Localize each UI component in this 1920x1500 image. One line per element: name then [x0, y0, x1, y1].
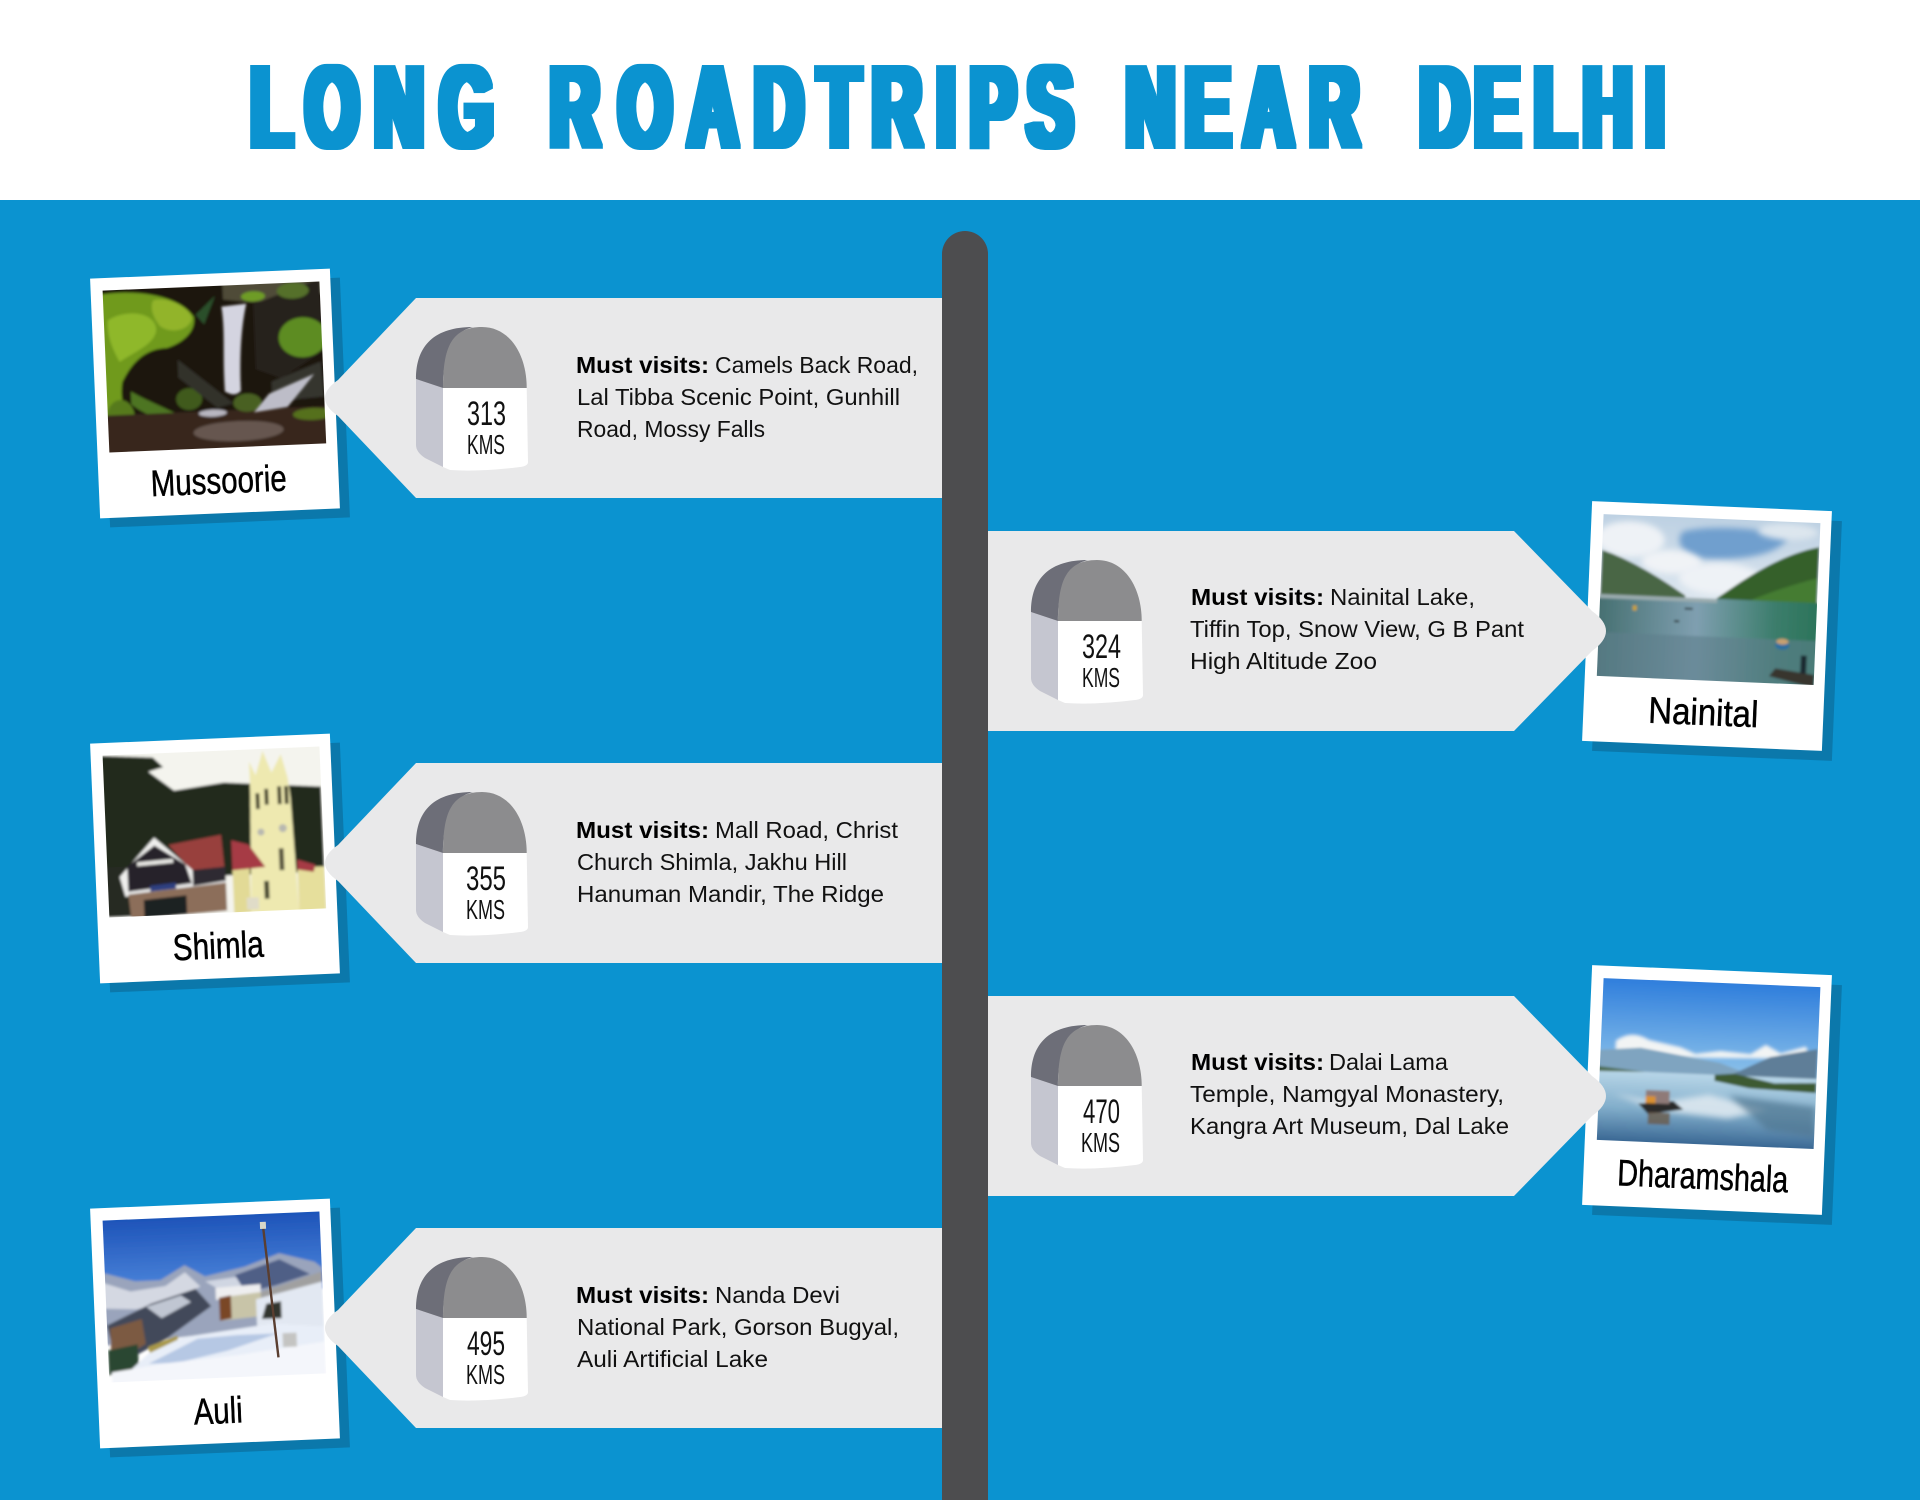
label: Auli: Auli [193, 1389, 244, 1432]
milestone: 495 KMS: 495 [467, 1325, 505, 1363]
label: Dharamshala: Dharamshala [1617, 1152, 1789, 1200]
title [251, 43, 1665, 173]
signpost arrow: Nainital [988, 531, 1606, 731]
must visits text: Must visits: [1191, 584, 1324, 610]
title: NEAR [1126, 43, 1359, 173]
polaroid: Nainital [1582, 501, 1842, 761]
signpost arrow: Mussoorie [325, 298, 942, 498]
milestone: 324 KMS [1031, 560, 1143, 704]
signpost arrow: Auli [325, 1228, 942, 1428]
milestone: 355 KMS: KMS [466, 894, 505, 925]
arrow shape [988, 531, 1606, 731]
polaroid: Dharamshala [1582, 965, 1842, 1225]
signpost arrow: Dharamshala [988, 996, 1606, 1196]
must visits text [576, 817, 899, 907]
must visits text: Nainital Lake, [1330, 584, 1475, 610]
title: LONG [251, 43, 493, 173]
milestone: 324 KMS: 324 [1082, 628, 1121, 666]
must visits text: High Altitude Zoo [1190, 648, 1377, 674]
must visits text: Must visits: [576, 817, 709, 843]
milestone: 470 KMS [1031, 1025, 1143, 1169]
title: ROADTRIPS [550, 43, 1073, 173]
must visits text: Kangra Art Museum, Dal Lake [1190, 1113, 1509, 1139]
photo: Mussoorie waterfall [99, 278, 334, 456]
must visits text: Hanuman Mandir, The Ridge [577, 881, 884, 907]
label: Mussoorie: Mussoorie [150, 458, 287, 504]
must visits text: Mall Road, Christ [715, 817, 899, 843]
milestone: 324 KMS: KMS [1082, 662, 1120, 693]
milestone: 355 KMS [416, 792, 528, 936]
label: Nainital: Nainital [1648, 690, 1759, 735]
photo: Shimla church [99, 743, 329, 921]
must visits text: Camels Back Road, [715, 352, 918, 378]
polaroid: Auli [90, 1199, 350, 1457]
must visits text: Must visits: [576, 352, 709, 378]
photo: Dharamshala lake [1594, 975, 1824, 1152]
must visits text: Tiffin Top, Snow View, G B Pant [1190, 616, 1525, 642]
title: DELHI [1419, 43, 1665, 173]
must visits text [1190, 1049, 1509, 1139]
milestone: 355 KMS: 355 [466, 860, 506, 898]
must visits text: Nanda Devi [715, 1282, 840, 1308]
signpost pole [942, 231, 988, 1500]
milestone: 495 KMS [416, 1257, 528, 1401]
arrow shape [325, 763, 942, 963]
must visits text [576, 1282, 899, 1372]
milestone: 313 KMS [416, 327, 528, 471]
must visits text: Church Shimla, Jakhu Hill [577, 849, 847, 875]
must visits text: Lal Tibba Scenic Point, Gunhill [577, 384, 900, 410]
milestone: 470 KMS: 470 [1083, 1093, 1120, 1131]
arrow shape [988, 996, 1606, 1196]
must visits text [1190, 584, 1525, 674]
must visits text: Dalai Lama [1329, 1049, 1448, 1075]
must visits text: Must visits: [1191, 1049, 1324, 1075]
photo: Nainital lake [1591, 511, 1824, 688]
photo: Auli snow mountains [99, 1208, 329, 1386]
must visits text: Auli Artificial Lake [577, 1346, 768, 1372]
polaroid: Shimla [90, 734, 350, 992]
label: Shimla: Shimla [172, 924, 265, 968]
header background [0, 0, 1920, 200]
must visits text: National Park, Gorson Bugyal, [577, 1314, 899, 1340]
signpost arrow: Shimla [325, 763, 942, 963]
must visits text [576, 352, 918, 442]
milestone: 313 KMS: 313 [467, 395, 506, 433]
milestone: 495 KMS: KMS [466, 1359, 505, 1390]
must visits text: Must visits: [576, 1282, 709, 1308]
polaroid: Mussoorie [90, 269, 350, 527]
arrow shape [325, 1228, 942, 1428]
must visits text: Temple, Namgyal Monastery, [1190, 1081, 1504, 1107]
arrow shape [325, 298, 942, 498]
milestone: 313 KMS: KMS [467, 429, 505, 460]
milestone: 470 KMS: KMS [1081, 1127, 1120, 1158]
must visits text: Road, Mossy Falls [577, 416, 765, 442]
